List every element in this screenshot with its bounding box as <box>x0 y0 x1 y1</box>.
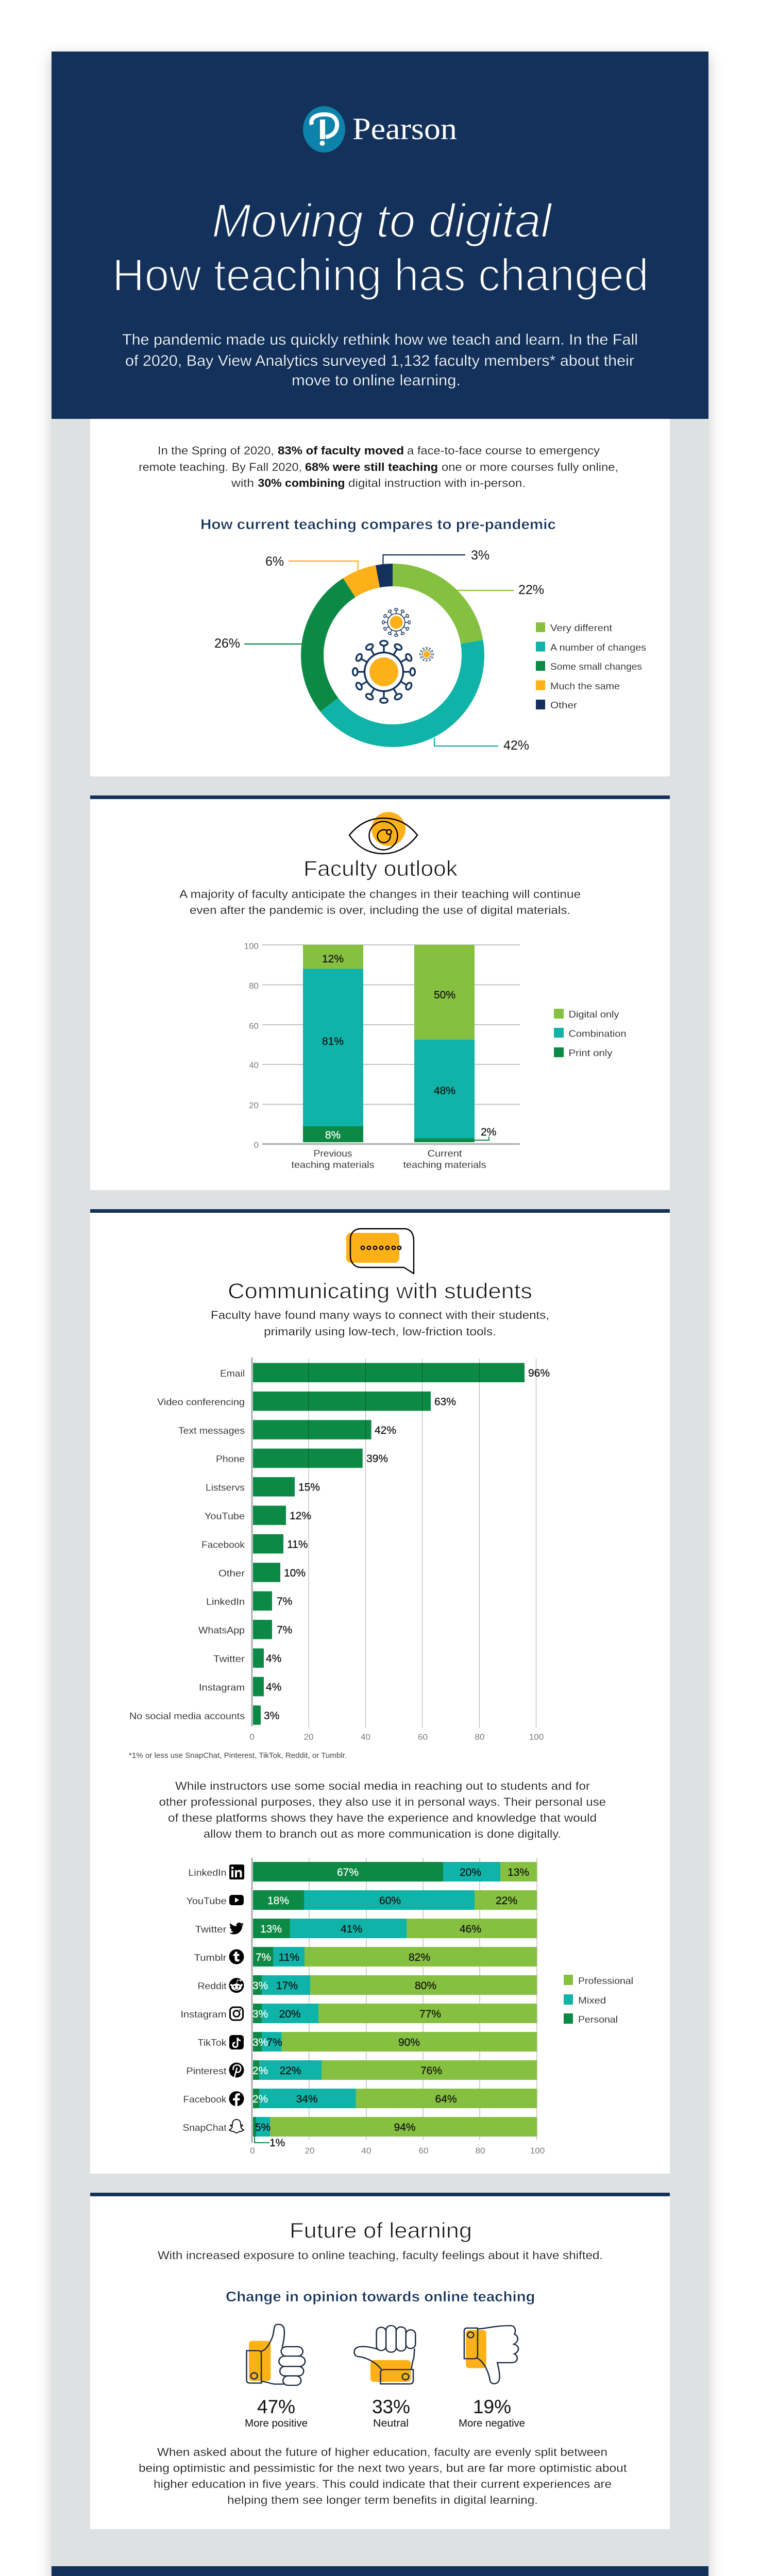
title: How teaching has changed <box>112 249 649 300</box>
stacked bar chart: teaching materials <box>244 941 520 1170</box>
text block: communicating intro <box>211 1309 549 1338</box>
stacked bar chart: teaching materials: 48% <box>434 1085 455 1097</box>
stacked bar chart: social media use: 77% <box>419 2008 441 2020</box>
legend: Much the same <box>550 681 620 691</box>
bar chart: channels used: Text messages <box>178 1426 245 1436</box>
icon: LinkedIn <box>229 1865 244 1879</box>
stacked bar chart: social media use: YouTube <box>187 1896 227 1906</box>
stacked bar chart: social media use: 3% <box>252 1980 268 1992</box>
stat: 19% more negative <box>459 2396 525 2429</box>
text block: spring to fall summary: 68% were still teaching <box>305 461 438 473</box>
bar chart: channels used: 20 <box>304 1732 313 1742</box>
text block: future conclusion: When asked about the future of higher education, faculty are evenly split between <box>157 2446 607 2459</box>
axis labels: 60 <box>419 2146 428 2156</box>
stacked bar chart: social media use: 80% <box>415 1980 436 1992</box>
text block: faculty outlook intro <box>179 888 581 917</box>
text block: spring to fall summary: digital instruction with in-person. <box>348 477 526 489</box>
panel: future of learning <box>90 2193 670 2529</box>
bar chart: channels used: Video conferencing <box>157 1397 245 1407</box>
legend: Personal <box>578 2014 618 2025</box>
icon: Tumblr <box>229 1950 244 1964</box>
icon: virus small <box>419 647 434 662</box>
bar chart: channels used: Twitter <box>213 1654 245 1664</box>
bar chart: channels used: 0 <box>249 1732 255 1742</box>
bar chart: channels used: 40 <box>361 1732 370 1742</box>
icon: Pearson logo <box>303 106 457 152</box>
icon: Facebook <box>229 2091 244 2106</box>
stat: 47% more positive <box>245 2396 308 2429</box>
stacked bar chart: teaching materials: Current <box>428 1148 462 1159</box>
icon: Instagram <box>230 2007 243 2020</box>
legend <box>554 1009 627 1058</box>
stacked bar chart: social media use: Instagram <box>180 2009 227 2020</box>
bar chart: channels used: Facebook <box>201 1539 245 1550</box>
stacked bar chart: social media use: 13% <box>260 1923 282 1935</box>
donut chart <box>214 548 544 753</box>
text block: spring to fall summary: 30% combining <box>258 477 345 489</box>
stacked bar chart: social media use: 20% <box>279 2008 301 2020</box>
stacked bar chart: teaching materials: 2% <box>481 1126 496 1138</box>
axis labels: 20 <box>305 2146 314 2156</box>
icon: thumbs down <box>464 2326 518 2384</box>
stacked bar chart: social media use: 76% <box>420 2065 442 2077</box>
stat: 47% more positive: More positive <box>245 2418 308 2429</box>
icon: eye <box>349 812 417 854</box>
text block: future conclusion: being optimistic and pessimistic for the next two years, but are far more optimistic about <box>139 2462 627 2475</box>
bar chart: channels used: YouTube <box>205 1511 245 1521</box>
intro text: The pandemic made us quickly rethink how we teach and learn. In the Fall <box>122 331 638 348</box>
heading: faculty outlook: Faculty outlook <box>303 856 458 880</box>
text block: personal use of social media: other professional purposes, they also use it in personal ways. Their personal use <box>159 1795 606 1808</box>
text block: future conclusion: helping them see longer term benefits in digital learning. <box>227 2494 538 2506</box>
grey page backdrop <box>52 419 708 2566</box>
axis labels: 100 <box>530 2146 545 2156</box>
bar chart: channels used: 4% <box>266 1681 281 1693</box>
stacked bar chart: social media use: Twitter <box>195 1924 227 1935</box>
stacked bar chart: social media use: TikTok <box>198 2038 227 2048</box>
legend <box>564 1975 633 2025</box>
axis labels: 80 <box>476 2146 485 2156</box>
donut chart: 6% <box>265 554 284 569</box>
text block: future intro: With increased exposure to online teaching, faculty feelings about it have shifted. <box>158 2249 603 2262</box>
text block: spring to fall summary: with <box>231 477 254 489</box>
stacked bar chart: social media use: 7% <box>256 1952 271 1963</box>
bar chart: channels used: Other <box>218 1568 245 1579</box>
icon: Pearson logo: Pearson <box>352 112 457 146</box>
stacked bar chart: social media use: 67% <box>337 1867 359 1878</box>
stacked bar chart: teaching materials: Previous <box>313 1148 352 1159</box>
text block: faculty outlook intro: A majority of faculty anticipate the changes in their teaching will continue <box>179 888 581 901</box>
icon: TikTok <box>229 2035 244 2049</box>
panel: faculty outlook <box>90 795 670 1190</box>
stacked bar chart: social media use: 5% <box>255 2122 271 2133</box>
legend: Other <box>550 700 577 710</box>
text block: future conclusion: higher education in five years. This could indicate that their current experiences are <box>154 2478 612 2490</box>
bar chart: channels used: 4% <box>266 1653 281 1665</box>
heading: future of learning: Future of learning <box>290 2218 472 2242</box>
bar chart: channels used: 39% <box>366 1453 388 1465</box>
title <box>112 195 649 300</box>
intro text: move to online learning. <box>292 372 461 389</box>
stacked bar chart: social media use: 17% <box>276 1980 298 1992</box>
icon: virus large <box>353 641 415 703</box>
stacked bar chart: teaching materials: 40 <box>249 1060 259 1070</box>
stacked bar chart: teaching materials: 100 <box>244 941 259 951</box>
stacked bar chart: teaching materials: teaching materials <box>292 1160 374 1170</box>
bar chart: channels used: 42% <box>375 1425 396 1436</box>
intro text: of 2020, Bay View Analytics surveyed 1,132 faculty members* about their <box>125 352 634 369</box>
stat: 19% more negative: More negative <box>459 2418 525 2429</box>
bar chart: channels used: 63% <box>434 1396 456 1408</box>
intro text <box>122 331 638 389</box>
header panel <box>52 52 708 419</box>
text block: spring to fall summary <box>139 444 618 489</box>
legend: Some small changes <box>550 662 642 672</box>
text block: communicating intro: primarily using low-tech, low-friction tools. <box>264 1325 496 1338</box>
stacked bar chart: social media use: 1% <box>269 2137 285 2149</box>
stacked bar chart: social media use: 3% <box>252 2037 268 2048</box>
stacked bar chart: teaching materials: 60 <box>249 1021 259 1031</box>
stacked bar chart: social media use: 2% <box>252 2093 268 2105</box>
text block: spring to fall summary: remote teaching. By Fall 2020, <box>139 461 302 473</box>
icon: neutral thumb <box>354 2326 415 2384</box>
donut chart: 3% <box>471 548 489 563</box>
stacked bar chart: social media use: 22% <box>279 2065 301 2077</box>
legend: Very different <box>550 623 612 633</box>
text block: personal use of social media: allow them to branch out as more communication is done digitally. <box>204 1827 561 1840</box>
text block: faculty outlook intro: even after the pandemic is over, including the use of digital materials. <box>190 904 570 917</box>
donut chart: 22% <box>518 583 544 597</box>
icon: speech bubble <box>346 1229 414 1274</box>
bar chart: channels used: LinkedIn <box>206 1597 245 1607</box>
bar chart: channels used: 100 <box>529 1732 544 1742</box>
stacked bar chart: teaching materials: 12% <box>322 953 344 965</box>
stacked bar chart: social media use: LinkedIn <box>189 1868 227 1878</box>
stacked bar chart: social media use: Tumblr <box>194 1953 227 1963</box>
bar chart: channels used: 10% <box>284 1567 306 1579</box>
stacked bar chart: social media use: 2% <box>252 2065 268 2077</box>
text block: spring to fall summary: one or more courses fully online, <box>442 461 618 473</box>
stacked bar chart: teaching materials: teaching materials <box>403 1160 486 1170</box>
heading: how current teaching compares: How current teaching compares to pre-pandemic <box>200 516 556 532</box>
stacked bar chart: social media use: Facebook <box>183 2094 227 2105</box>
footer panel <box>52 2566 708 2576</box>
legend: Combination <box>569 1028 627 1039</box>
stat: 33% neutral: 33% <box>372 2396 410 2417</box>
panel: how current teaching compares <box>90 419 670 776</box>
stacked bar chart: social media use: 20% <box>460 1867 481 1878</box>
footnote: *1% or less use SnapChat, Pinterest, TikTok, Reddit, or Tumblr. <box>129 1751 347 1760</box>
stat: 47% more positive: 47% <box>257 2396 295 2417</box>
icon: Reddit <box>229 1978 244 1993</box>
icon: virus medium <box>382 608 410 636</box>
axis labels: 0 <box>250 2146 255 2156</box>
legend: Print only <box>569 1048 612 1058</box>
stacked bar chart: social media use: 3% <box>252 2008 268 2020</box>
legend: A number of changes <box>550 642 646 653</box>
text block: spring to fall summary: In the Spring of 2020, <box>158 444 274 457</box>
heading: communicating with students: Communicating with students <box>228 1279 532 1303</box>
stacked bar chart: social media use: Pinterest <box>187 2066 227 2076</box>
stacked bar chart: social media use: 22% <box>496 1895 517 1907</box>
stacked bar chart: teaching materials: 81% <box>322 1036 344 1047</box>
icon: Twitter <box>229 1923 244 1934</box>
bar chart: channels used: 15% <box>298 1482 320 1494</box>
stacked bar chart: teaching materials: 8% <box>325 1129 341 1141</box>
donut chart: 26% <box>214 636 240 651</box>
bar chart: channels used: 60 <box>418 1732 428 1742</box>
axis labels: 40 <box>362 2146 371 2156</box>
stacked bar chart: social media use: 82% <box>409 1952 430 1963</box>
text block: future conclusion <box>139 2446 627 2506</box>
bar chart: channels used: 96% <box>528 1367 550 1379</box>
legend: Mixed <box>578 1995 606 2006</box>
donut chart: 42% <box>503 738 529 753</box>
bar chart: channels used: Phone <box>216 1454 245 1464</box>
stacked bar chart: social media use: 13% <box>508 1867 529 1878</box>
stacked bar chart: social media use: 11% <box>279 1952 299 1963</box>
stat: 19% more negative: 19% <box>473 2396 511 2417</box>
bar chart: channels used: Email <box>220 1368 245 1379</box>
stat: 33% neutral: Neutral <box>373 2418 409 2429</box>
title: Moving to digital <box>212 195 553 247</box>
heading: change in opinion: Change in opinion towards online teaching <box>226 2289 535 2304</box>
bar chart: channels used: Instagram <box>199 1682 245 1692</box>
text block: personal use of social media <box>159 1780 606 1840</box>
text block: personal use of social media: While instructors use some social media in reaching out to students and for <box>175 1780 590 1792</box>
legend: Digital only <box>569 1009 619 1020</box>
stacked bar chart: social media use: 18% <box>267 1895 289 1907</box>
bar chart: channels used: 7% <box>277 1596 292 1607</box>
icon: SnapChat <box>229 2120 244 2133</box>
stacked bar chart: teaching materials: 80 <box>249 981 259 991</box>
stacked bar chart: social media use: SnapChat <box>182 2123 227 2133</box>
stacked bar chart: teaching materials: 50% <box>434 989 455 1001</box>
stacked bar chart: social media use: 64% <box>435 2093 457 2105</box>
bar chart: channels used: 80 <box>475 1732 484 1742</box>
icon: Pinterest <box>229 2063 244 2077</box>
stacked bar chart: social media use <box>180 1858 545 2156</box>
stacked bar chart: social media use: 46% <box>460 1923 481 1935</box>
stacked bar chart: social media use: 90% <box>398 2037 420 2048</box>
stacked bar chart: teaching materials: 0 <box>254 1140 259 1150</box>
bar chart: channels used: Listservs <box>206 1483 245 1493</box>
panel: communicating with students <box>90 1209 670 2174</box>
stacked bar chart: social media use: 7% <box>266 2037 282 2048</box>
text block: communicating intro: Faculty have found many ways to connect with their students, <box>211 1309 549 1321</box>
stacked bar chart: social media use: Reddit <box>198 1981 227 1991</box>
text block: spring to fall summary: a face-to-face course to emergency <box>407 444 600 457</box>
icon: thumbs up <box>247 2325 305 2385</box>
axis labels <box>250 2146 545 2156</box>
bar chart: channels used <box>129 1358 550 1742</box>
bar chart: channels used: 12% <box>290 1510 311 1522</box>
legend: Professional <box>578 1976 633 1986</box>
text block: personal use of social media: of these platforms shows they have the experience and knowledge that would <box>168 1811 597 1824</box>
stacked bar chart: social media use: 34% <box>296 2093 318 2105</box>
text block: spring to fall summary: 83% of faculty moved <box>278 444 404 457</box>
stat: 33% neutral <box>372 2396 410 2429</box>
legend <box>536 622 646 710</box>
stacked bar chart: social media use: 94% <box>394 2122 416 2133</box>
bar chart: channels used: 3% <box>264 1710 279 1722</box>
icon: YouTube <box>229 1895 244 1905</box>
bar chart: channels used: No social media accounts <box>129 1711 245 1721</box>
stacked bar chart: social media use: 60% <box>379 1895 401 1907</box>
bar chart: channels used: WhatsApp <box>198 1625 245 1636</box>
bar chart: channels used: 11% <box>287 1538 308 1550</box>
bar chart: channels used: 7% <box>277 1624 292 1636</box>
stacked bar chart: social media use: 41% <box>341 1923 362 1935</box>
stacked bar chart: teaching materials: 20 <box>249 1100 259 1110</box>
